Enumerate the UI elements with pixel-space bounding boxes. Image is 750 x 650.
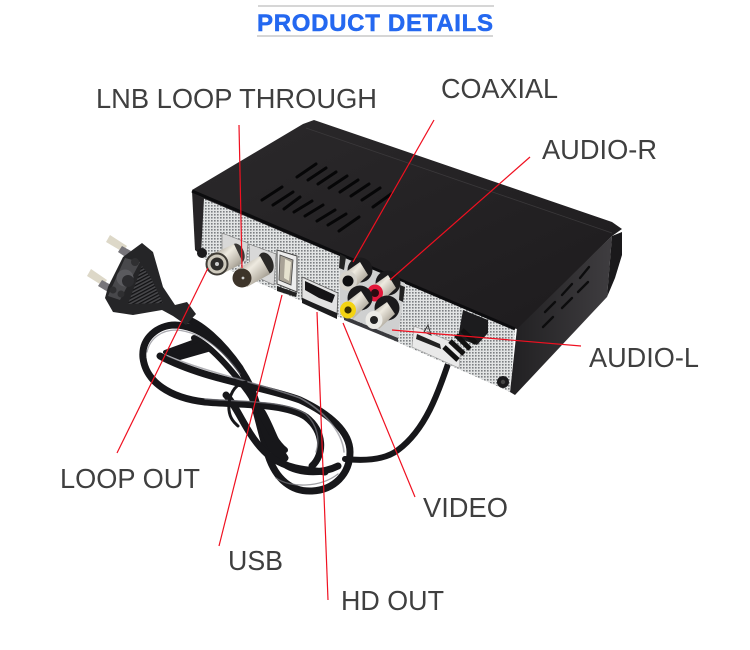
loop out connector <box>206 241 247 274</box>
box: back panel <box>192 191 515 392</box>
antenna port plates <box>222 233 248 262</box>
label: audio-r: AUDIO-R <box>542 134 657 165</box>
label: hd out: HD OUT <box>341 585 444 616</box>
hdmi port <box>302 277 338 319</box>
rca: video yellow <box>340 286 372 319</box>
label: video: VIDEO <box>423 492 508 523</box>
side vents <box>543 267 589 327</box>
callout lines <box>117 120 581 600</box>
usb port <box>277 250 297 297</box>
label: audio-l: AUDIO-L <box>589 342 699 373</box>
power plug <box>87 235 196 325</box>
screws <box>197 248 207 258</box>
label: coaxial: COAXIAL <box>441 73 558 104</box>
power strain relief <box>444 310 488 360</box>
rca: audio-l white <box>366 296 400 329</box>
power cord <box>143 318 452 491</box>
set-top box <box>192 120 622 395</box>
box: right end face <box>510 236 612 395</box>
lnb connector <box>232 250 277 288</box>
cable tie <box>229 382 246 426</box>
rca: audio-r red <box>367 270 400 302</box>
label: usb: USB <box>228 545 283 576</box>
rca ports <box>339 254 405 342</box>
title: PRODUCT DETAILS <box>257 10 493 37</box>
top vents <box>262 164 391 231</box>
box: top face <box>192 120 622 329</box>
caution label <box>412 326 461 368</box>
rca: coaxial black <box>339 258 372 291</box>
label: loop out: LOOP OUT <box>60 463 200 494</box>
label: lnb loop through: LNB LOOP THROUGH <box>96 83 377 114</box>
